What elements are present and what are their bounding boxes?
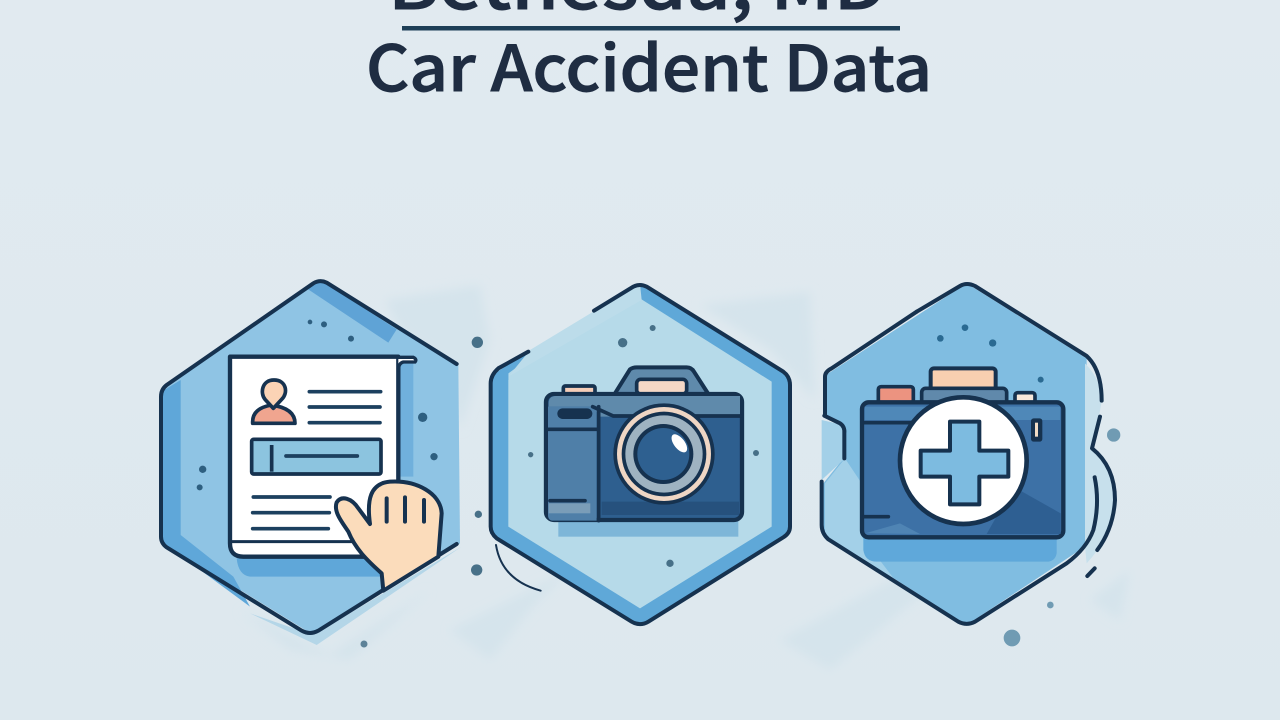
particle	[360, 640, 368, 648]
icon: camera	[546, 367, 742, 521]
title divider	[402, 26, 900, 30]
hexagon outline	[822, 284, 1115, 624]
particles	[471, 325, 759, 576]
panel: document hexagon	[161, 280, 462, 645]
hexagon outline	[161, 281, 457, 633]
title	[366, 0, 932, 110]
particles	[937, 324, 1044, 383]
particles	[197, 320, 438, 490]
icon: report document	[230, 357, 416, 557]
icon: medical camera	[862, 368, 1063, 537]
panel: medical camera hexagon	[822, 283, 1120, 646]
camera lens	[613, 403, 715, 505]
panel: camera hexagon	[471, 284, 790, 626]
hexagon outline	[491, 285, 790, 624]
icon: hand	[336, 482, 442, 591]
title: Car Accident Data: Car Accident Data	[366, 19, 932, 110]
icon: person	[253, 380, 295, 423]
form field	[252, 439, 381, 474]
medical cross badge	[900, 397, 1027, 524]
